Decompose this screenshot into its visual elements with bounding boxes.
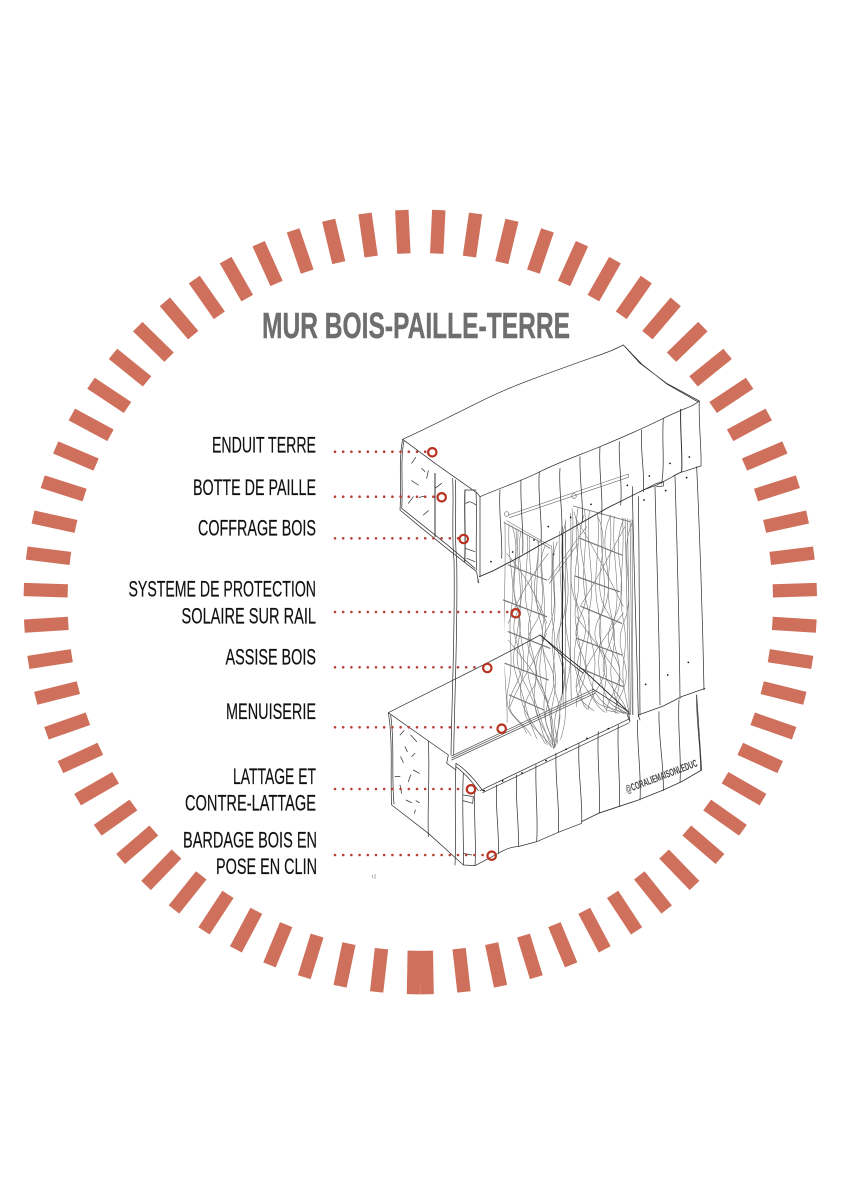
label: bardage bois en pose en clin: POSE EN CLIN [216,854,317,879]
wall section sketch [388,345,705,866]
label: enduit terre: ENDUIT TERRE [212,433,316,458]
label: lattage et contre-lattage: LATTAGE ET [233,764,316,789]
lower bottom edge [475,823,582,866]
label: bardage bois en pose en clin: BARDAGE BOIS EN [183,827,317,852]
lower end face [388,713,475,866]
upper wall block [400,345,701,755]
right facade planks [632,467,705,717]
solar protection blinds [503,474,633,752]
stray pencil mark [372,874,375,879]
label: coffrage bois: COFFRAGE BOIS [198,516,316,541]
label: assise bois: ASSISE BOIS [226,644,316,669]
upper end face [400,439,478,582]
leader: menuiserie [335,724,506,733]
lower top face [388,635,540,713]
leader: enduit terre [335,448,436,456]
central fold and sill joint [540,535,628,712]
label: lattage et contre-lattage: CONTRE-LATTAGE [185,790,316,815]
circular ring of dashes [24,210,817,994]
leader: botte de paille [335,493,446,501]
fixing dots [483,456,690,792]
label: menuiserie: MENUISERIE [226,699,316,724]
label: systeme de protection solaire sur rail: SOLAIRE SUR RAIL [182,603,316,628]
sill rail lines [452,689,595,760]
watermark credit: @CORALIEMAISONLEDUC [624,758,699,796]
label: systeme de protection solaire sur rail: SYSTEME DE PROTECTION [128,577,316,602]
label: botte de paille: BOTTE DE PAILLE [193,475,316,500]
title: MUR BOIS-PAILLE-TERRE [262,305,570,346]
label: bardage bois en pose en clin [183,827,317,879]
leader: coffrage bois [335,535,468,543]
label: systeme de protection solaire sur rail [128,577,316,628]
lower wall block [388,635,702,866]
lower cladding boards [496,695,701,853]
label: lattage et contre-lattage [185,764,316,815]
leader: lattage [335,785,475,794]
upper top face [403,345,623,439]
leader: bardage [335,852,496,860]
upper cladding boards [500,418,663,558]
leader: systeme de protection [335,609,520,618]
leader: assise bois [335,664,491,672]
